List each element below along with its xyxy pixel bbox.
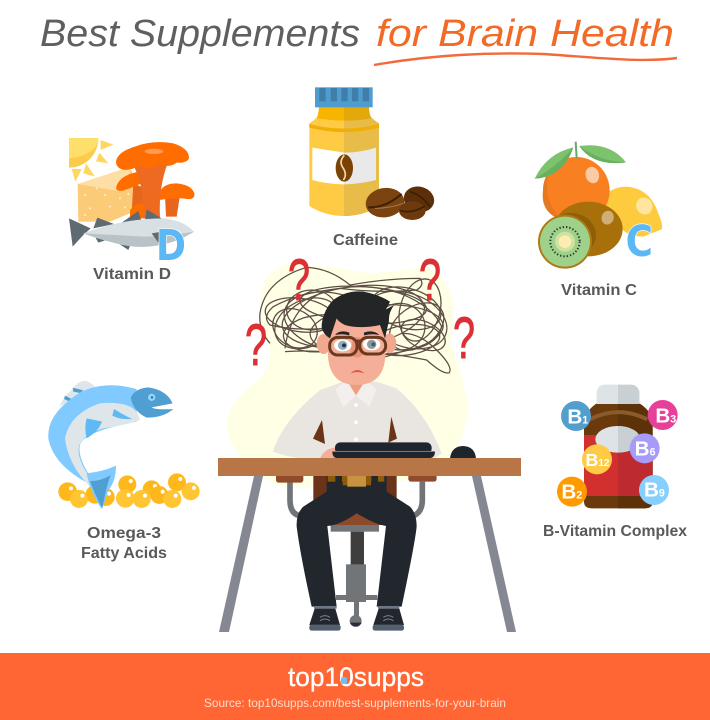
chair arm supports	[290, 482, 422, 516]
question marks	[245, 248, 475, 378]
icon: sun	[69, 138, 113, 182]
illustration: confused man at desk	[218, 248, 521, 632]
desk legs	[219, 476, 516, 632]
badge: B12: B12	[585, 450, 610, 470]
shoes	[309, 606, 404, 631]
icon: omega-3 salmon and capsules	[48, 381, 200, 509]
badge: B9: B9	[644, 479, 665, 502]
chair gaps beside torso	[313, 417, 397, 444]
label: Vitamin D: Vitamin D	[93, 266, 171, 283]
icon: caffeine bottle and beans	[309, 87, 437, 220]
mouth	[351, 370, 364, 373]
eyebrows	[335, 331, 379, 335]
question marks: ?	[453, 306, 475, 371]
vitamin letter C: C	[626, 217, 653, 267]
footer	[0, 653, 710, 720]
shirt	[273, 382, 442, 459]
question marks: ?	[245, 313, 267, 378]
label: Caffeine: Caffeine	[333, 232, 398, 249]
hand	[320, 448, 340, 458]
icon: vitamin D foods	[69, 138, 195, 271]
face	[328, 314, 385, 385]
source line: Source: top10supps.com/best-supplements-for-your-brain	[204, 696, 506, 710]
ears	[317, 333, 396, 354]
desk top	[218, 458, 521, 476]
capsule mark	[341, 677, 347, 684]
desk	[218, 458, 521, 632]
mouse	[450, 446, 476, 458]
chair base	[331, 525, 379, 627]
capsules	[58, 473, 200, 508]
title	[40, 13, 677, 65]
orange	[535, 142, 626, 224]
lemon	[598, 187, 662, 237]
keyboard	[332, 442, 435, 458]
badge: B3: B3	[655, 405, 676, 428]
question marks: ?	[288, 248, 310, 313]
kiwi	[538, 202, 623, 269]
icon: cheese	[78, 170, 138, 222]
icon: B-vitamin bottle	[557, 385, 678, 508]
title: orange part: for Brain Health	[376, 13, 674, 55]
eyes	[334, 338, 380, 351]
icon: vitamin C fruits	[535, 142, 662, 269]
badge: B1: B1	[567, 405, 588, 428]
collar	[335, 380, 377, 407]
coffee beans	[364, 183, 437, 220]
hair	[322, 291, 394, 338]
nose	[350, 337, 364, 357]
chair seat	[327, 513, 387, 525]
chair back	[313, 473, 397, 505]
bottle	[584, 385, 653, 508]
icon: mushrooms	[116, 142, 195, 218]
title underline	[374, 53, 677, 65]
belt	[328, 473, 384, 487]
glasses	[330, 337, 386, 355]
upper body	[273, 291, 476, 459]
label: Omega-3 Fatty Acids: Omega-3	[87, 525, 161, 542]
lower body and chair	[276, 473, 437, 631]
thought blob	[227, 263, 468, 488]
bottle	[309, 87, 379, 216]
armrests	[276, 473, 437, 483]
neck	[344, 373, 368, 395]
label: Omega-3 Fatty Acids	[81, 525, 167, 562]
scribble thoughts	[260, 267, 455, 373]
title: dark part: Best Supplements	[40, 13, 360, 55]
icon: fish	[69, 209, 194, 250]
shirt buttons	[354, 403, 358, 441]
label: Omega-3 Fatty Acids: Fatty Acids	[81, 545, 167, 562]
label: Vitamin C: Vitamin C	[561, 282, 637, 299]
footer logo: top10supps	[288, 662, 424, 692]
salmon	[48, 381, 173, 509]
badge: B6: B6	[635, 438, 656, 461]
label: B-Vitamin Complex: B-Vitamin Complex	[543, 523, 687, 540]
question marks: ?	[419, 248, 441, 313]
badge: B2: B2	[561, 480, 582, 503]
trousers	[297, 476, 417, 607]
vitamin letter D: D	[156, 221, 186, 271]
